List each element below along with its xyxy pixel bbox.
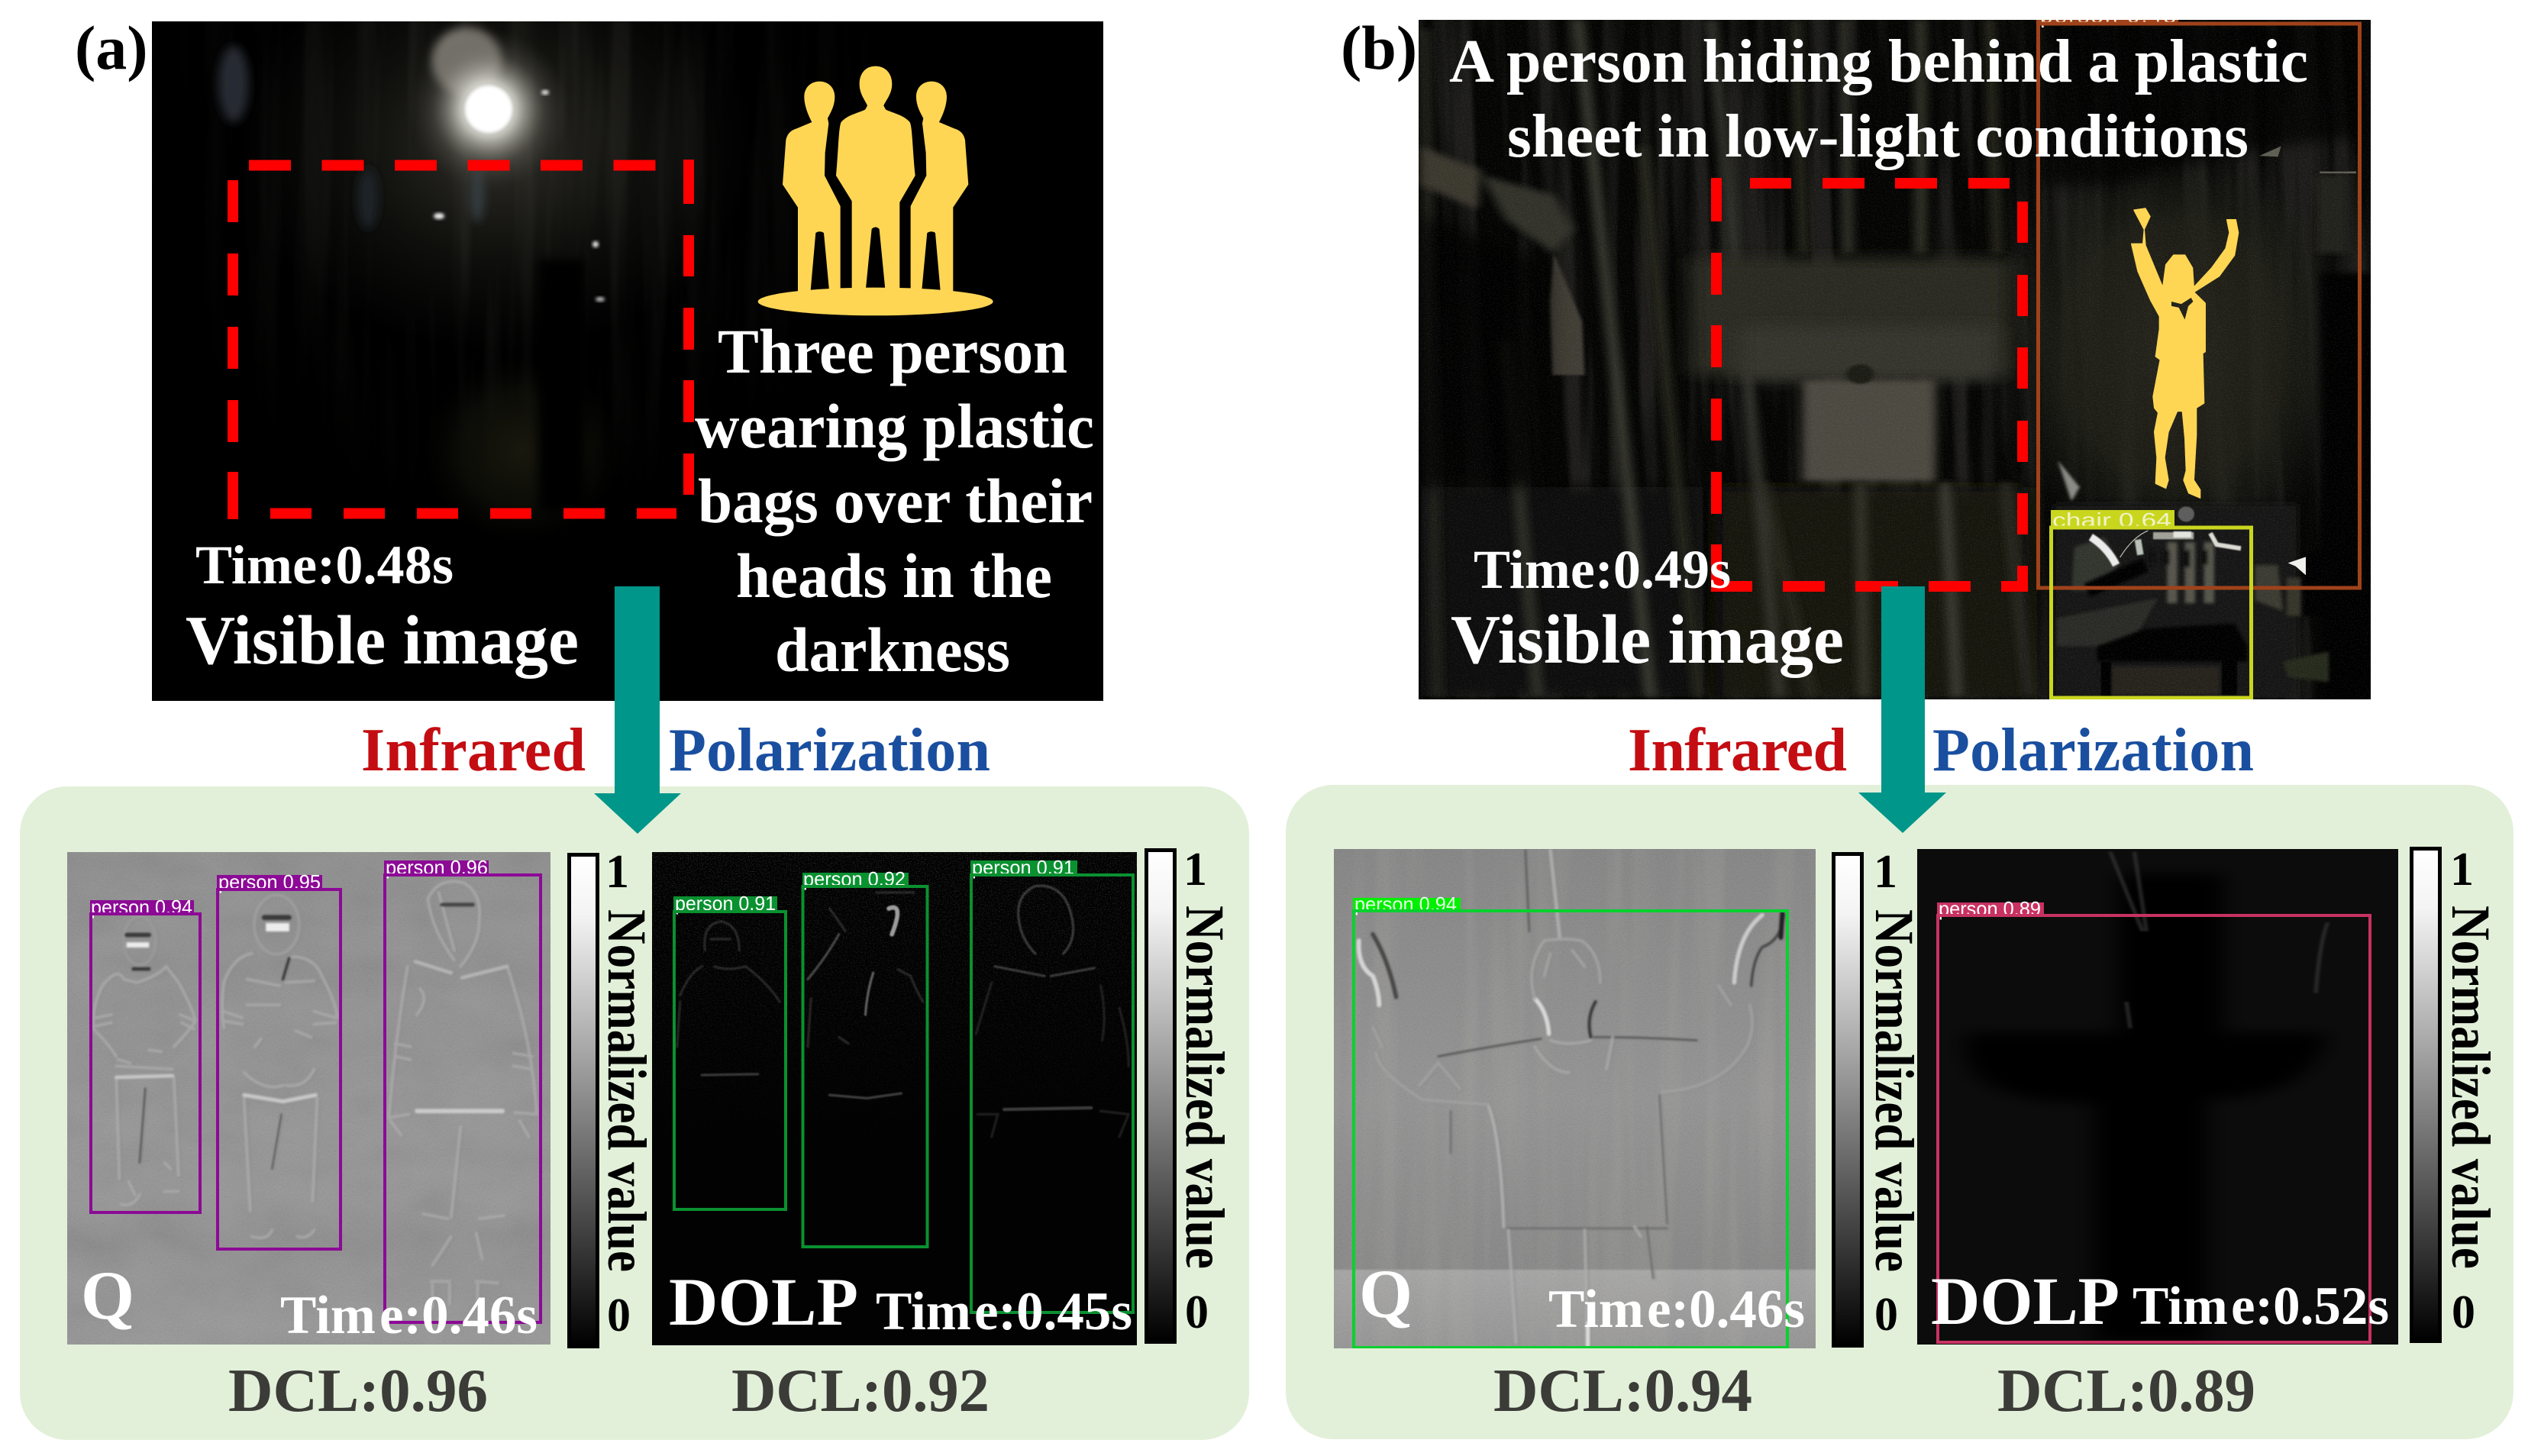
DCL scores (b): DCL:0.89 [1997, 1356, 2255, 1425]
colorbar DOLP (a): 1 [1183, 844, 1207, 896]
panel labels: (b) [1341, 13, 1417, 82]
DOLP and time text (b): Time:0.52s [2132, 1277, 2389, 1336]
detection box [1937, 897, 2370, 1342]
caption: three person [695, 316, 1094, 685]
caption: three person: bags over their [698, 466, 1093, 536]
detection boxes: person 0.94 [91, 896, 192, 918]
colorbar DOLP (b): 1 [2450, 844, 2474, 896]
caption: three person: heads in the [736, 541, 1052, 611]
caption: person hiding [1449, 27, 2308, 170]
Q and time text (b) [1359, 1257, 1805, 1339]
photo: curtain scene [1419, 20, 2371, 699]
detection box: person: person 0.48 [2040, 3, 2176, 28]
time label: Time:0.48s [195, 534, 454, 596]
DCL scores (a): DCL:0.92 [731, 1356, 990, 1425]
icon: three people [758, 66, 993, 315]
DOLP image (a) [652, 852, 1137, 1345]
Q image (a) [67, 852, 550, 1345]
detection boxes [673, 856, 1133, 1312]
DCL scores (a) [228, 1356, 990, 1425]
Q and time text (a): Q [81, 1258, 134, 1334]
Q and time text (b): Q [1359, 1257, 1413, 1332]
caption: person hiding: A person hiding behind a plastic [1449, 27, 2308, 95]
Q and time text (a) [81, 1258, 538, 1345]
figures: faint outlines [677, 886, 1128, 1137]
colorbar Q (a): Normalized value [596, 909, 657, 1272]
colorbar Q (a) [570, 846, 657, 1347]
colorbar DOLP (b) [2411, 844, 2501, 1341]
modality labels (b) [1628, 717, 2254, 784]
DOLP and time text (a): DOLP [669, 1265, 858, 1340]
colorbar DOLP (b): 0 [2452, 1287, 2475, 1338]
caption: three person: darkness [775, 615, 1010, 685]
colorbar Q (b): 0 [1874, 1289, 1898, 1341]
DOLP and time text (a): Time:0.45s [876, 1282, 1132, 1341]
DOLP and time text (a) [669, 1265, 1132, 1341]
arrow (a) [594, 586, 681, 834]
detection boxes: person 0.96 [386, 856, 488, 879]
photo: dark scene with flashlight [213, 21, 705, 513]
detection box [1353, 893, 1787, 1348]
panel: green background (b) [1286, 785, 2513, 1439]
detection boxes: person 0.92 [803, 867, 906, 890]
detection boxes [90, 856, 541, 1322]
colorbar Q (b) [1834, 846, 1925, 1345]
figures: three people embossed [93, 881, 537, 1307]
chair scene [2054, 504, 2362, 700]
panel: green background (a) [20, 786, 1249, 1440]
colorbar Q (a): 1 [605, 846, 629, 898]
arrow (b) [1858, 586, 1946, 833]
caption: three person: wearing plastic [695, 391, 1094, 461]
detection box: person 0.89 [1939, 897, 2041, 920]
caption: three person: Three person [718, 316, 1067, 386]
red dashed region [1716, 178, 2028, 592]
colorbar Q (a): 0 [607, 1290, 631, 1341]
caption: person hiding: sheet in low-light conditions [1507, 102, 2249, 170]
figure: person behind plastic sheet [1358, 851, 1784, 1346]
DCL scores (a): DCL:0.96 [228, 1356, 488, 1425]
detection boxes: person 0.91 [972, 856, 1074, 879]
modality labels (a) [361, 717, 990, 784]
modality labels (b): Infrared [1628, 717, 1847, 784]
icon: person with raised arms [2132, 208, 2239, 498]
panel labels: (a) [75, 13, 148, 82]
colorbar Q (b): Normalized value [1864, 909, 1925, 1272]
detection box: person 0.94 [1354, 893, 1457, 915]
detection boxes: person 0.95 [218, 870, 321, 893]
Q image (b) [1334, 849, 1816, 1348]
panel (a): visible image [152, 0, 1103, 701]
DOLP and time text (b): DOLP [1931, 1264, 2120, 1339]
modality labels (b): Polarization [1932, 717, 2254, 784]
modality labels (a): Infrared [361, 717, 586, 784]
DCL scores (b): DCL:0.94 [1493, 1356, 1752, 1425]
DCL scores (b) [1493, 1356, 2255, 1425]
red dashed region [233, 160, 689, 519]
panel (b): visible image [1419, 20, 2371, 699]
figure: dark silhouette [1965, 852, 2328, 1341]
detection boxes: person 0.91 [675, 892, 776, 915]
modality labels (a): Polarization [669, 717, 990, 784]
image title: Visible image [186, 602, 579, 679]
Q and time text (a): Time:0.46s [280, 1286, 538, 1345]
colorbar DOLP (a): Normalized value [1174, 906, 1235, 1269]
DOLP and time text (b) [1931, 1264, 2389, 1339]
colorbar DOLP (a) [1147, 844, 1235, 1342]
colorbar Q (b): 1 [1874, 846, 1897, 898]
image title: Visible image [1451, 601, 1844, 678]
panel labels [75, 13, 1417, 82]
Q and time text (b): Time:0.46s [1548, 1280, 1805, 1339]
detection box: person [2036, 3, 2359, 588]
time label: Time:0.49s [1474, 539, 1731, 600]
detection box: chair [2051, 508, 2251, 698]
colorbar DOLP (b): Normalized value [2440, 906, 2501, 1269]
DOLP image (b) [1917, 849, 2398, 1345]
colorbar DOLP (a): 0 [1185, 1287, 1209, 1338]
detection box: chair: chair 0.64 [2052, 508, 2171, 531]
